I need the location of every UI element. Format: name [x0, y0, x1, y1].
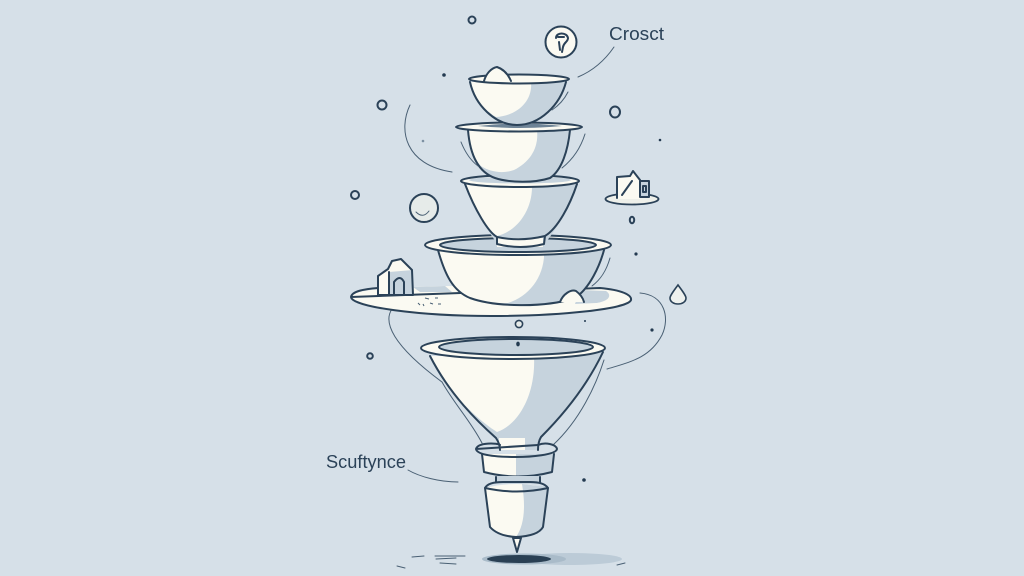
swirl lines [389, 105, 666, 382]
bowl 3: conical bowl [461, 175, 579, 247]
bowl 1: top bowl with mound [469, 67, 569, 125]
bowl 2 [456, 122, 585, 182]
sphere with smile [410, 194, 438, 222]
collar of funnel [476, 444, 557, 477]
plate with bowl and house [351, 259, 631, 316]
label: Scuftynce: Scuftynce [326, 451, 406, 472]
nozzle tip [513, 538, 521, 552]
puddle [397, 553, 625, 568]
icon: house on small plate [606, 171, 658, 204]
mound in top bowl [484, 67, 511, 81]
icon: question bulb circle [546, 26, 576, 58]
leader line: Crosct [578, 47, 614, 77]
plate [351, 286, 631, 316]
droplet [670, 285, 686, 304]
falling drop [515, 320, 523, 346]
bowl 4: wide bowl [425, 235, 611, 305]
lower cup [485, 476, 548, 537]
small rock [560, 291, 584, 302]
label: Crosct: Crosct [609, 23, 664, 44]
icon: small house on plate [378, 259, 413, 296]
leader line: Scuftynce [408, 470, 458, 482]
small bubbles and dots [351, 16, 661, 482]
funnel [421, 337, 605, 450]
